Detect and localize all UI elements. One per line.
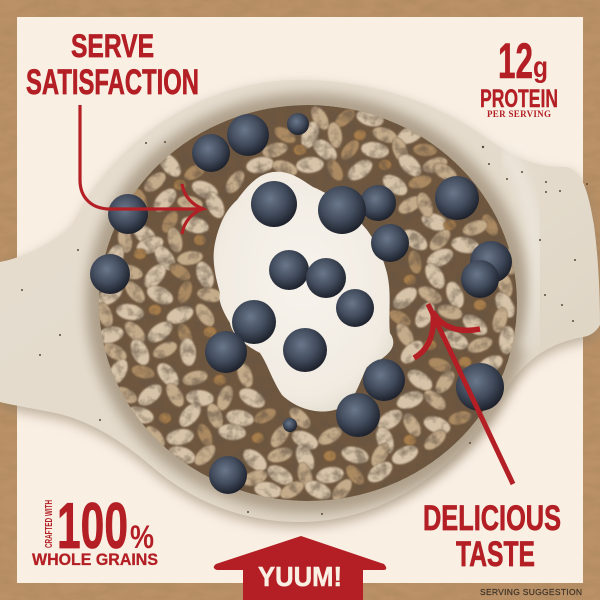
- bowl speckles: [21, 141, 588, 515]
- stat: 12g protein per serving: 12: [498, 33, 533, 89]
- yogurt dollop: [214, 172, 393, 412]
- bowl with handles: [0, 80, 600, 522]
- heading: serve satisfaction: SATISFACTION: [26, 63, 199, 102]
- heading: serve satisfaction: [26, 28, 199, 102]
- blueberries: [90, 113, 512, 494]
- caption: serving suggestion: SERVING SUGGESTION: [480, 587, 582, 597]
- badge: yuum arrow: [214, 536, 386, 600]
- arrow: serve satisfaction: [80, 105, 203, 234]
- stat: crafted with 100% whole grains: CRAFTED WITH: [43, 500, 55, 548]
- heading: delicious taste: TASTE: [456, 535, 535, 574]
- stat: 12g protein per serving: g: [533, 51, 548, 84]
- photo: bowl of granola with yogurt and blueberries: [0, 80, 600, 527]
- heading: delicious taste: [423, 499, 561, 574]
- stat: crafted with 100% whole grains: [32, 489, 158, 569]
- bowl shadow: [0, 85, 600, 527]
- stat: 12g protein per serving: [480, 33, 558, 119]
- stat: 12g protein per serving: PROTEIN: [480, 85, 558, 113]
- arrow: delicious taste: [414, 304, 513, 484]
- badge: yuum arrow: YUUM!: [258, 561, 342, 592]
- granola: [94, 100, 525, 510]
- stat: crafted with 100% whole grains: 100: [57, 489, 128, 562]
- stat: 12g protein per serving: PER SERVING: [487, 109, 551, 119]
- stat: crafted with 100% whole grains: WHOLE GRAINS: [32, 551, 158, 569]
- heading: serve satisfaction: SERVE: [71, 28, 154, 64]
- stat: crafted with 100% whole grains: %: [130, 519, 154, 555]
